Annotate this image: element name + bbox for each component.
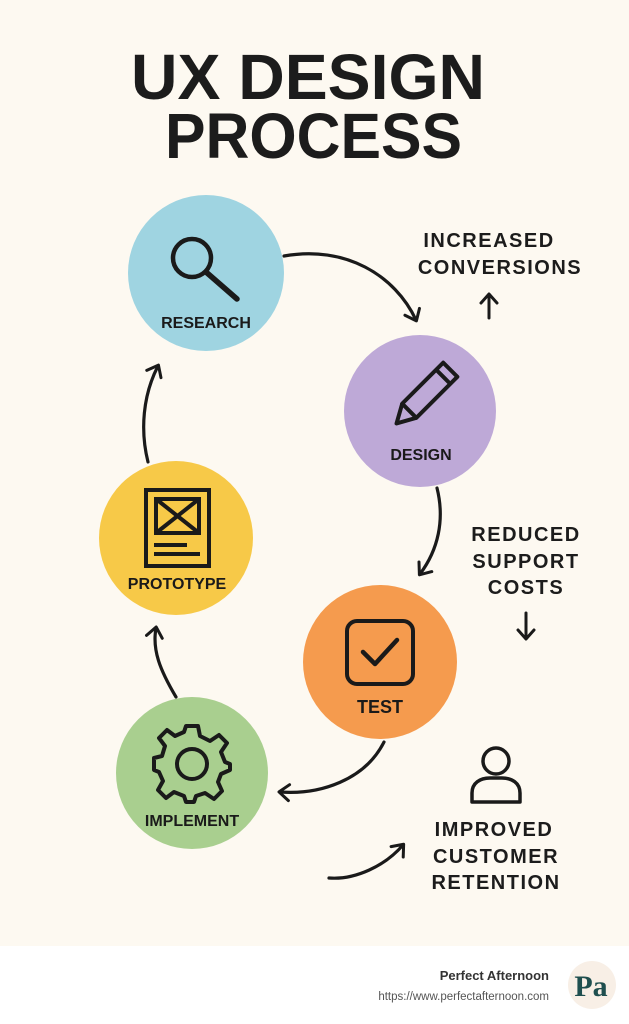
step: test bbox=[303, 585, 457, 739]
title bbox=[131, 41, 485, 172]
step: design: DESIGN bbox=[390, 447, 452, 464]
icon: down arrow bbox=[518, 613, 534, 639]
step: prototype: PROTOTYPE bbox=[128, 576, 227, 593]
benefit: reduced support costs: REDUCED bbox=[471, 524, 581, 546]
step: research bbox=[128, 195, 284, 351]
logo: Pa bbox=[574, 970, 608, 1003]
step: research: RESEARCH bbox=[161, 315, 251, 332]
footer bbox=[0, 946, 629, 1024]
arrows: cycle bbox=[144, 254, 440, 878]
icon: up arrow bbox=[481, 294, 497, 318]
footer: Perfect Afternoon bbox=[440, 968, 549, 983]
benefit: reduced support costs: COSTS bbox=[488, 577, 564, 599]
footer: https://www.perfectafternoon.com bbox=[378, 991, 549, 1003]
benefit: increased conversions: INCREASED bbox=[423, 230, 555, 252]
step: implement: IMPLEMENT bbox=[145, 813, 239, 830]
step: test: TEST bbox=[357, 697, 403, 717]
benefit: improved customer retention: IMPROVED bbox=[435, 819, 553, 841]
title: PROCESS bbox=[165, 100, 462, 172]
benefit: improved customer retention: CUSTOMER bbox=[433, 846, 559, 868]
logo bbox=[568, 961, 616, 1009]
benefit: improved customer retention bbox=[431, 748, 561, 894]
benefit: increased conversions: CONVERSIONS bbox=[418, 257, 582, 279]
step: prototype bbox=[99, 461, 253, 615]
benefit: reduced support costs bbox=[471, 524, 581, 639]
icon: person bbox=[472, 748, 520, 802]
benefit: improved customer retention: RETENTION bbox=[431, 872, 561, 894]
step: design bbox=[344, 335, 496, 487]
benefit: increased conversions bbox=[418, 230, 582, 318]
title: UX DESIGN bbox=[131, 41, 485, 113]
benefit: reduced support costs: SUPPORT bbox=[472, 551, 580, 573]
step: implement bbox=[116, 697, 268, 849]
